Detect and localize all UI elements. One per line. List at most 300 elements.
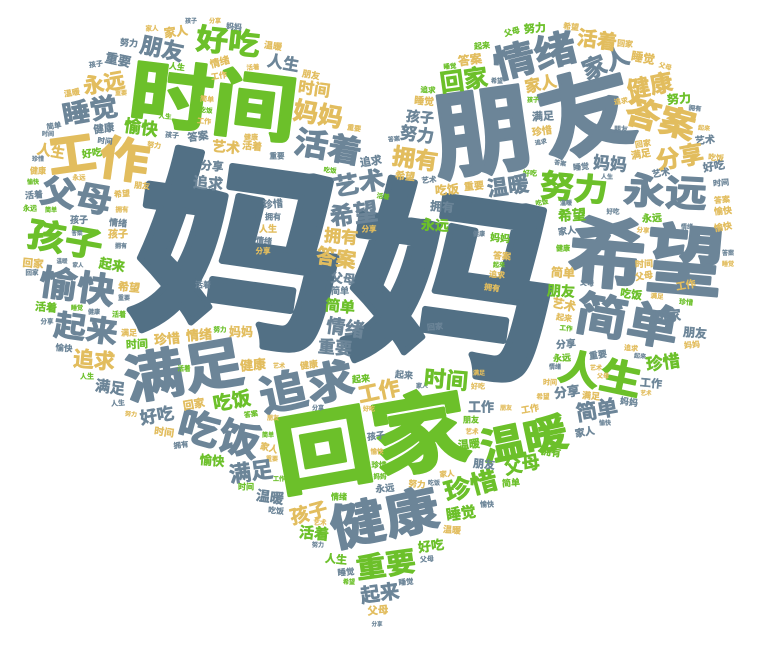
medium and small words: 努力 [408,478,426,490]
medium and small words: 满足 [94,377,126,399]
medium and small words: 妈妈 [619,395,639,408]
medium and small words: 吃饭 [199,105,213,115]
medium and small words: 健康 [88,308,100,316]
medium and small words: 家人 [416,382,428,390]
medium and small words: 吃饭 [268,505,284,516]
medium and small words: 父母 [658,61,673,72]
medium and small words: 答案 [722,249,734,257]
medium and small words: 简单 [324,296,356,317]
medium and small words: 朋友 [614,124,628,134]
medium and small words: 艺术 [590,364,602,372]
medium and small words: 健康 [30,166,46,176]
medium and small words: 睡觉 [443,61,457,71]
word: 简单: 简单 [571,287,683,357]
medium and small words: 追求 [420,84,436,95]
medium and small words: 珍惜 [531,123,553,139]
medium and small words: 答案 [457,50,483,69]
medium and small words: 分享 [209,17,221,25]
medium and small words: 愉快 [370,446,384,456]
medium and small words: 永远 [375,482,395,495]
medium and small words: 睡觉 [414,94,435,108]
medium and small words: 朋友 [301,68,321,81]
medium and small words: 睡觉 [398,576,414,587]
medium and small words: 满足 [650,291,664,301]
medium and small words: 孩子 [287,497,330,529]
word: 妈妈: 妈妈 [117,133,573,411]
word: 珍惜: 珍惜 [441,466,501,507]
medium and small words: 妈妈 [684,339,700,350]
word: 重要: 重要 [354,547,418,585]
medium and small words: 追求 [613,96,628,106]
medium and small words: 艺术 [640,389,652,397]
medium and small words: 分享 [40,316,54,326]
medium and small words: 家人 [574,424,596,440]
word: 孩子: 孩子 [24,214,106,266]
medium and small words: 好吃 [81,145,103,161]
medium and small words: 艺术 [466,426,479,436]
word: 艺术: 艺术 [331,166,387,202]
medium and small words: 分享 [312,404,324,412]
medium and small words: 人生 [325,551,348,567]
medium and small words: 分享 [256,246,271,256]
medium and small words: 妈妈 [229,324,253,339]
medium and small words: 愉快 [713,220,733,233]
medium and small words: 回家 [22,256,45,271]
medium and small words: 活着 [246,62,260,72]
medium and small words: 分享 [654,141,706,175]
medium and small words: 温暖 [63,86,81,99]
medium and small words: 回家 [26,268,39,276]
medium and small words: 孩子 [70,214,88,225]
medium and small words: 温暖 [255,487,285,507]
medium and small words: 满足 [227,457,275,487]
medium and small words: 永远 [642,211,662,225]
medium and small words: 时间 [126,336,148,352]
medium and small words: 工作 [468,400,494,414]
medium and small words: 简单 [574,396,620,426]
medium and small words: 艺术 [314,518,327,526]
medium and small words: 妈妈 [226,21,242,32]
medium and small words: 父母 [634,270,654,282]
medium and small words: 好吃 [606,206,620,216]
medium and small words: 拥有 [688,103,702,113]
medium and small words: 回家 [652,307,682,325]
medium and small words: 孩子 [108,228,128,240]
medium and small words: 工作 [675,277,697,293]
medium and small words: 简单 [200,94,214,104]
medium and small words: 永远 [553,352,571,363]
medium and small words: 健康 [625,69,675,103]
medium and small words: 吃饭 [211,387,253,416]
medium and small words: 活着 [35,299,58,315]
word: 答案: 答案 [621,93,700,147]
medium and small words: 答案 [243,409,258,419]
medium and small words: 睡觉 [445,503,477,525]
medium and small words: 拥有 [540,444,562,460]
medium and small words: 满足 [121,328,137,338]
medium and small words: 温暖 [263,39,283,52]
medium and small words: 健康 [239,356,267,374]
medium and small words: 好吃 [471,382,485,390]
medium and small words: 孩子 [527,96,539,104]
medium and small words: 珍惜 [262,197,283,211]
medium and small words: 重要 [104,50,132,70]
medium and small words: 追求 [192,173,224,194]
medium and small words: 答案 [315,244,357,273]
medium and small words: 愉快 [27,178,39,186]
medium and small words: 情绪 [681,223,693,231]
medium and small words: 工作 [197,116,211,126]
medium and small words: 朋友 [473,456,496,472]
medium and small words: 简单 [45,206,57,214]
medium and small words: 拥有 [265,212,281,222]
medium and small words: 简单 [331,285,349,296]
medium and small words: 工作 [210,69,228,82]
medium and small words: 父母 [580,279,594,288]
medium and small words: 拥有 [390,143,440,175]
medium and small words: 努力 [399,122,435,147]
medium and small words: 健康 [244,132,258,142]
medium and small words: 重要 [588,348,608,361]
medium and small words: 愉快 [123,115,159,140]
medium and small words: 家人 [523,71,558,97]
medium and small words: 回家 [438,64,490,98]
medium and small words: 父母 [597,373,609,380]
word: 温暖: 温暖 [476,409,572,471]
medium and small words: 人生 [80,372,94,380]
medium and small words: 时间 [42,130,54,138]
medium and small words: 健康 [556,244,570,252]
medium and small words: 吃饭 [428,479,440,487]
medium and small words: 希望 [491,77,503,85]
medium and small words: 工作 [273,475,285,483]
medium and small words: 珍惜 [372,460,387,470]
medium and small words: 重要 [266,455,278,463]
medium and small words: 妈妈 [291,97,345,133]
medium and small words: 活着 [25,188,43,201]
medium and small words: 满足 [582,389,600,402]
medium and small words: 起来 [352,372,370,385]
word: 活着: 活着 [291,124,365,170]
medium and small words: 愉快 [199,452,226,469]
medium and small words: 重要 [118,294,130,302]
medium and small words: 回家 [427,321,443,332]
medium and small words: 朋友 [267,414,279,422]
medium and small words: 拥有 [429,198,455,215]
medium and small words: 分享 [371,620,383,628]
medium and small words: 睡觉 [722,260,734,268]
medium and small words: 睡觉 [337,566,355,578]
word: 永远: 永远 [622,170,708,216]
medium and small words: 满足 [473,369,485,377]
medium and small words: 家人 [579,42,633,86]
medium and small words: 家人 [259,440,279,455]
medium and small words: 情绪 [256,235,272,246]
medium and small words: 情绪 [331,492,347,502]
medium and small words: 情绪 [109,216,127,229]
medium and small words: 答案 [187,129,210,144]
medium and small words: 拥有 [173,438,190,451]
medium and small words: 孩子 [366,429,386,442]
medium and small words: 珍惜 [645,350,681,375]
word: 希望: 希望 [565,210,727,308]
medium and small words: 朋友 [463,414,479,424]
medium and small words: 吃饭 [619,286,643,302]
medium and small words: 时间 [635,258,653,269]
medium and small words: 努力 [214,324,226,334]
medium and small words: 家人 [439,468,455,479]
medium and small words: 永远 [421,216,449,234]
large words [24,22,727,585]
word: 工作: 工 [45,127,99,183]
medium and small words: 好吃 [417,537,445,555]
medium and small words: 朋友 [134,180,150,191]
medium and small words: 希望 [395,169,416,183]
medium and small words: 拥有 [116,204,129,214]
medium and small words: 艺术 [694,133,715,147]
medium and small words: 工作 [559,323,573,333]
medium and small words: 妈妈 [592,153,628,175]
word: 朋友 [425,54,646,194]
medium and small words: 时间 [153,424,175,440]
medium and small words: 情绪 [549,363,561,371]
medium and small words: 起来 [98,255,126,275]
word: 时间: 时间 [125,50,301,154]
medium and small words: 分享 [200,158,224,174]
medium and small words: 简单 [262,431,274,439]
medium and small words: 活着 [298,523,330,544]
medium and small words: 追求 [489,269,505,280]
medium and small words: 活着 [576,25,619,55]
medium and small words: 简单 [46,119,63,132]
medium and small words: 睡觉 [630,48,656,67]
medium and small words: 回家 [182,395,206,413]
medium and small words: 珍惜 [679,297,693,307]
word: 情绪: 情绪 [489,27,581,87]
medium and small words: 努力 [125,409,137,419]
medium and small words: 拥有 [483,281,501,294]
medium and small words: 永远 [23,204,37,212]
medium and small words: 活着 [112,310,126,318]
word: 努力: 努力 [539,167,609,209]
medium and small words: 起来 [555,311,573,324]
medium and small words: 吃饭 [434,181,460,198]
medium and small words: 工作 [356,376,402,408]
medium and small words: 重要 [317,337,353,359]
medium and small words: 吃饭 [708,152,724,163]
medium and small words: 时间 [297,78,331,101]
medium and small words: 希望 [118,279,141,295]
medium and small words: 活着 [195,280,211,290]
medium and small words: 希望 [536,392,550,400]
medium and small words: 努力 [666,90,692,107]
word: 健康: 健康 [325,482,445,558]
medium and small words: 追求 [359,153,383,169]
medium and small words: 好吃 [702,157,726,175]
medium and small words: 起来 [698,123,710,133]
medium and small words: 希望 [114,188,130,199]
medium and small words: 温暖 [560,199,572,207]
medium and small words: 起来 [474,40,490,51]
medium and small words: 愉快 [714,204,732,217]
medium and small words: 工作 [520,402,540,415]
medium and small words: 时间 [423,366,469,394]
medium and small words: 重要 [347,123,362,133]
medium and small words: 情绪 [208,53,231,71]
medium and small words: 答案 [71,229,83,237]
medium and small words: 时间 [713,177,729,188]
medium and small words: 工作 [640,375,663,391]
medium and small words: 满足 [630,146,652,162]
word: 满足: 满足 [120,332,248,412]
medium and small words: 努力 [312,541,324,549]
word: 工作: 作 [96,131,152,191]
medium and small words: 情绪 [325,315,365,342]
word: 父母: 父母 [37,173,115,221]
medium and small words: 起来 [493,261,505,269]
medium and small words: 家人 [72,261,84,269]
medium and small words: 简单 [502,476,520,489]
medium and small words: 回家 [634,137,652,150]
word: 朋友: 友 [528,54,646,176]
medium and small words: 温暖 [56,257,68,265]
medium and small words: 答案 [554,158,567,168]
word: 愉快: 愉快 [37,262,117,312]
medium and small words: 睡觉 [573,161,589,172]
medium and small words: 努力 [147,140,162,150]
medium and small words: 温暖 [443,523,461,536]
medium and small words: 健康 [93,121,116,136]
word: 追求: 追求 [255,354,359,422]
medium and small words: 好吃 [523,168,537,178]
medium and small words: 父母 [503,26,521,38]
medium and small words: 答案 [388,134,400,144]
medium and small words: 起来 [395,368,413,381]
medium and small words: 好吃 [139,404,175,428]
medium and small words: 活着 [376,191,391,201]
medium and small words: 追求 [72,347,116,374]
medium and small words: 活着 [178,364,191,372]
word: 好吃: 好吃 [194,22,262,62]
medium and small words: 答案 [714,194,730,205]
medium and small words: 家人 [557,224,577,237]
medium and small words: 家人 [163,22,189,41]
medium and small words: 健康 [473,230,485,238]
medium and small words: 孩子 [165,130,179,140]
medium and small words: 愉快 [480,500,494,508]
medium and small words: 人生 [36,141,66,161]
medium and small words: 朋友 [682,324,708,341]
medium and small words: 分享 [553,383,581,401]
medium and small words: 分享 [362,224,377,234]
medium and small words: 妈妈 [490,231,511,245]
word: 睡觉: 睡觉 [60,92,120,130]
medium and small words: 人生 [168,60,186,73]
medium and small words: 人生 [259,223,277,234]
word: 工作 [45,127,152,191]
medium and small words: 永远 [81,69,127,99]
medium and small words: 艺术 [651,166,671,179]
medium and small words: 时间 [543,378,557,386]
medium and small words: 重要 [463,179,484,193]
medium and small words: 温暖 [486,173,530,201]
medium and small words: 孩子 [88,59,103,69]
medium and small words: 愉快 [599,419,611,427]
medium and small words: 希望 [343,578,355,586]
medium and small words: 父母 [367,604,389,618]
medium and small words: 分享 [555,337,576,351]
medium and small words: 分享 [636,225,650,235]
medium and small words: 人生 [601,173,613,181]
medium and small words: 艺术 [551,295,577,314]
medium and small words: 艺术 [211,138,241,156]
medium and small words: 回家 [617,38,633,49]
medium and small words: 人生 [266,52,300,75]
medium and small words: 活着 [242,139,263,153]
medium and small words: 追求 [534,137,547,147]
medium and small words: 时间 [97,135,113,146]
medium and small words: 情绪 [185,326,213,344]
medium and small words: 人生 [158,111,172,121]
medium and small words: 朋友 [138,32,186,66]
medium and small words: 起来 [359,580,401,608]
medium and small words: 温暖 [457,436,480,452]
medium and small words: 吃饭 [535,196,550,208]
word: 朋友: 朋 [425,74,539,194]
medium and small words: 好吃 [363,405,375,413]
medium and small words: 父母 [330,271,356,287]
word: 吃饭: 吃饭 [173,404,265,466]
medium and small words: 家人 [146,24,159,32]
medium and small words: 妈妈 [374,472,387,480]
medium and small words: 努力 [523,20,546,36]
medium and small words: 重要 [270,150,285,160]
word: 起来: 起来 [52,308,120,350]
medium and small words: 希望 [328,198,380,232]
medium and small words: 睡觉 [71,304,83,312]
medium and small words: 健康 [299,358,319,371]
medium and small words: 朋友 [547,282,575,300]
medium and small words: 孩子 [185,17,197,25]
medium and small words: 拥有 [115,242,127,250]
medium and small words: 时间 [238,482,254,492]
medium and small words: 珍惜 [32,155,44,163]
medium and small words: 起来 [634,351,646,361]
medium and small words: 答案 [493,249,511,262]
word: 回家: 回家 [267,378,477,508]
medium and small words: 努力 [120,36,138,49]
medium and small words: 艺术 [421,174,437,185]
medium and small words: 拥有 [323,226,359,248]
medium and small words: 简单 [551,264,575,281]
medium and small words: 希望 [558,206,586,224]
medium and small words: 吃饭 [323,165,337,175]
medium and small words: 希望 [563,21,579,32]
medium and small words: 父母 [502,451,542,479]
medium and small words: 孩子 [405,108,435,126]
medium and small words: 永远 [72,172,86,182]
medium and small words: 追求 [624,343,638,353]
medium and small words: 珍惜 [153,330,181,348]
medium and small words: 艺术 [273,362,285,370]
medium and small words: 朋友 [500,404,512,412]
medium and small words: 愉快 [55,342,73,354]
word: 人生: 人生 [555,346,645,404]
medium and small words: 人生 [111,398,125,408]
medium and small words: 重要 [115,89,127,97]
medium and small words: 满足 [532,108,554,124]
medium and small words: 父母 [420,555,434,564]
